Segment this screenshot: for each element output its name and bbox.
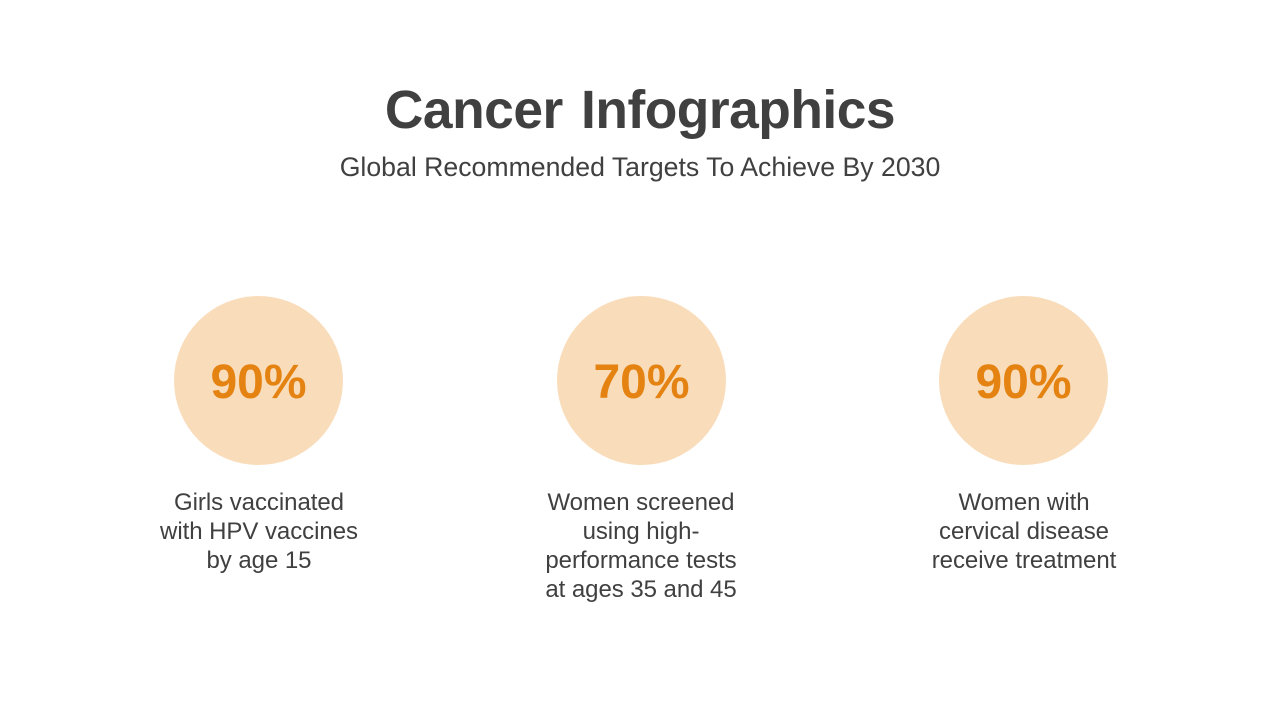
circle: 90% treatment [939,296,1108,465]
text: screened description: Women screened [548,489,734,516]
text: vaccinated description: Girls vaccinated [174,489,344,516]
panel: girls vaccinated [160,296,358,574]
text: screened description: using high- [583,518,699,545]
text: screened description: performance tests [545,547,737,574]
panel: women screened [545,296,737,603]
text: treatment description [932,489,1116,574]
title: Cancer Infographics [385,81,895,140]
text: screened description [545,489,737,603]
text: screened description: at ages 35 and 45 [545,576,737,603]
circle: 90% vaccinated [174,296,343,465]
text: vaccinated description: by age 15 [206,547,311,574]
text: vaccinated description [160,489,358,574]
circle: 70% screened [557,296,726,465]
panel: women treated [932,296,1116,574]
text: treatment description: Women with [958,489,1090,516]
text: treatment description: cervical disease [939,518,1109,545]
text: vaccinated description: with HPV vaccines [160,518,358,545]
stat: 90%: 90% [210,356,307,409]
stat: 70%: 70% [593,356,690,409]
stat: 90%: 90% [975,356,1072,409]
subtitle: Global Recommended Targets To Achieve By 2030 [340,152,940,182]
text: treatment description: receive treatment [932,547,1116,574]
